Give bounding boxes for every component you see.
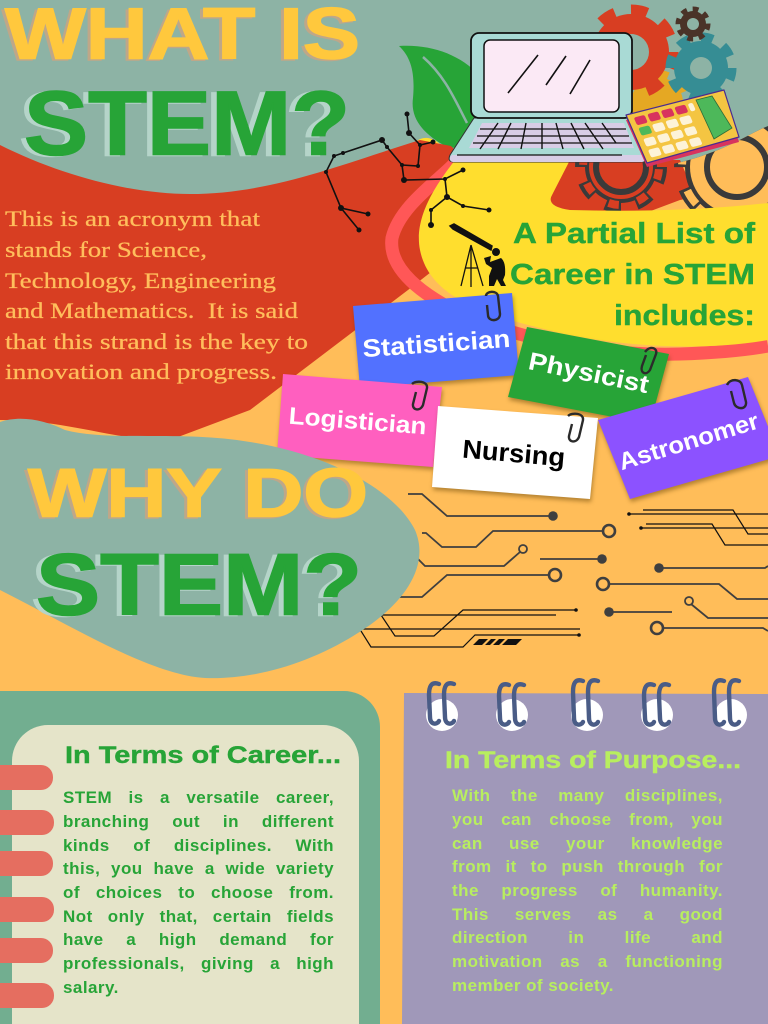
- title: STEM? second: STEM?: [36, 536, 362, 634]
- icon: laptop: [449, 33, 645, 162]
- teal blob: why do: [0, 419, 419, 678]
- text block: purpose: you can choose from, you: [452, 810, 723, 829]
- text block: career: kinds of disciplines. With: [63, 836, 334, 855]
- card: Logistician: Logistician: [288, 403, 427, 440]
- text block: purpose: the progress of humanity.: [452, 881, 723, 900]
- text block: career: [63, 788, 334, 997]
- text block: career: STEM is a versatile career,: [63, 788, 334, 807]
- card: Statistician: [353, 292, 519, 388]
- red blob behind gears: [550, 160, 692, 215]
- icon: back gears: [589, 9, 732, 132]
- text block: purpose: motivation as a functioning: [452, 952, 723, 971]
- card: Nursing: [432, 406, 598, 499]
- icon: telescope and person: [450, 224, 506, 287]
- description paragraph: and Mathematics. It is said: [5, 298, 298, 323]
- text block: purpose: can use your knowledge: [452, 834, 723, 853]
- text block: career: salary.: [63, 978, 119, 997]
- text block: career: branching out in different: [63, 812, 334, 831]
- card: Physicist: Physicist: [526, 347, 652, 399]
- icon: leaf: [399, 46, 480, 150]
- text block: career: of choices to choose from.: [63, 883, 334, 902]
- card: Logistician: [277, 374, 442, 467]
- title: STEM?: STEM?: [24, 74, 350, 174]
- text block: career: have a high demand for: [63, 930, 334, 949]
- title: STEM?: STEM?: [19, 74, 344, 176]
- description paragraph: Technology, Engineering: [5, 268, 276, 293]
- description paragraph: that this strand is the key to: [5, 329, 308, 354]
- text block: career: professionals, giving a high: [63, 954, 334, 973]
- icon: outline gears: [575, 126, 768, 211]
- text block: purpose: from it to push through for: [452, 857, 723, 876]
- card: Physicist: [508, 327, 669, 424]
- description paragraph: This is an acronym that: [5, 206, 260, 231]
- text block: career: Not only that, certain fields: [63, 907, 334, 926]
- title: WHY DO: WHY DO: [25, 456, 365, 533]
- notebook tabs: [0, 765, 54, 1008]
- career list heading: [510, 218, 755, 332]
- description paragraph: innovation and progress.: [5, 359, 277, 384]
- text block: purpose: direction in life and: [452, 928, 723, 947]
- text block: career: this, you have a wide variety: [63, 859, 334, 878]
- yellow back patch: [415, 138, 480, 165]
- card: Astronomer: [598, 377, 768, 499]
- text block: purpose: With the many disciplines,: [452, 786, 723, 805]
- text block: purpose: This serves as a good: [452, 905, 723, 924]
- heading: in terms of purpose: In Terms of Purpose...: [445, 747, 741, 774]
- heading: in terms of career: In Terms of Career...: [65, 742, 341, 769]
- text block: purpose: member of society.: [452, 976, 614, 995]
- card: Astronomer: Astronomer: [616, 408, 762, 476]
- yellow blob: [419, 160, 768, 346]
- title: WHY DO: WHY DO: [28, 454, 368, 532]
- constellation: [324, 112, 492, 232]
- card: Nursing: Nursing: [461, 434, 566, 472]
- title: STEM? second: STEM?: [31, 538, 357, 634]
- description paragraph: [5, 206, 308, 384]
- description paragraph: stands for Science,: [5, 237, 207, 262]
- career list heading: Career in STEM: [510, 259, 755, 291]
- career list heading: includes:: [614, 300, 755, 332]
- career list heading: A Partial List of: [513, 218, 755, 250]
- teal header background: [0, 0, 768, 205]
- icon: calculator: [626, 90, 739, 167]
- notebook rings: [429, 680, 739, 725]
- panel: purpose notebook: [402, 680, 768, 1024]
- red wave panel: [0, 140, 470, 440]
- text block: purpose: [452, 786, 723, 995]
- card: Statistician: Statistician: [362, 325, 511, 363]
- pink band: [392, 160, 768, 354]
- panel: career notebook: [0, 691, 380, 1024]
- circuit lines: [361, 494, 768, 647]
